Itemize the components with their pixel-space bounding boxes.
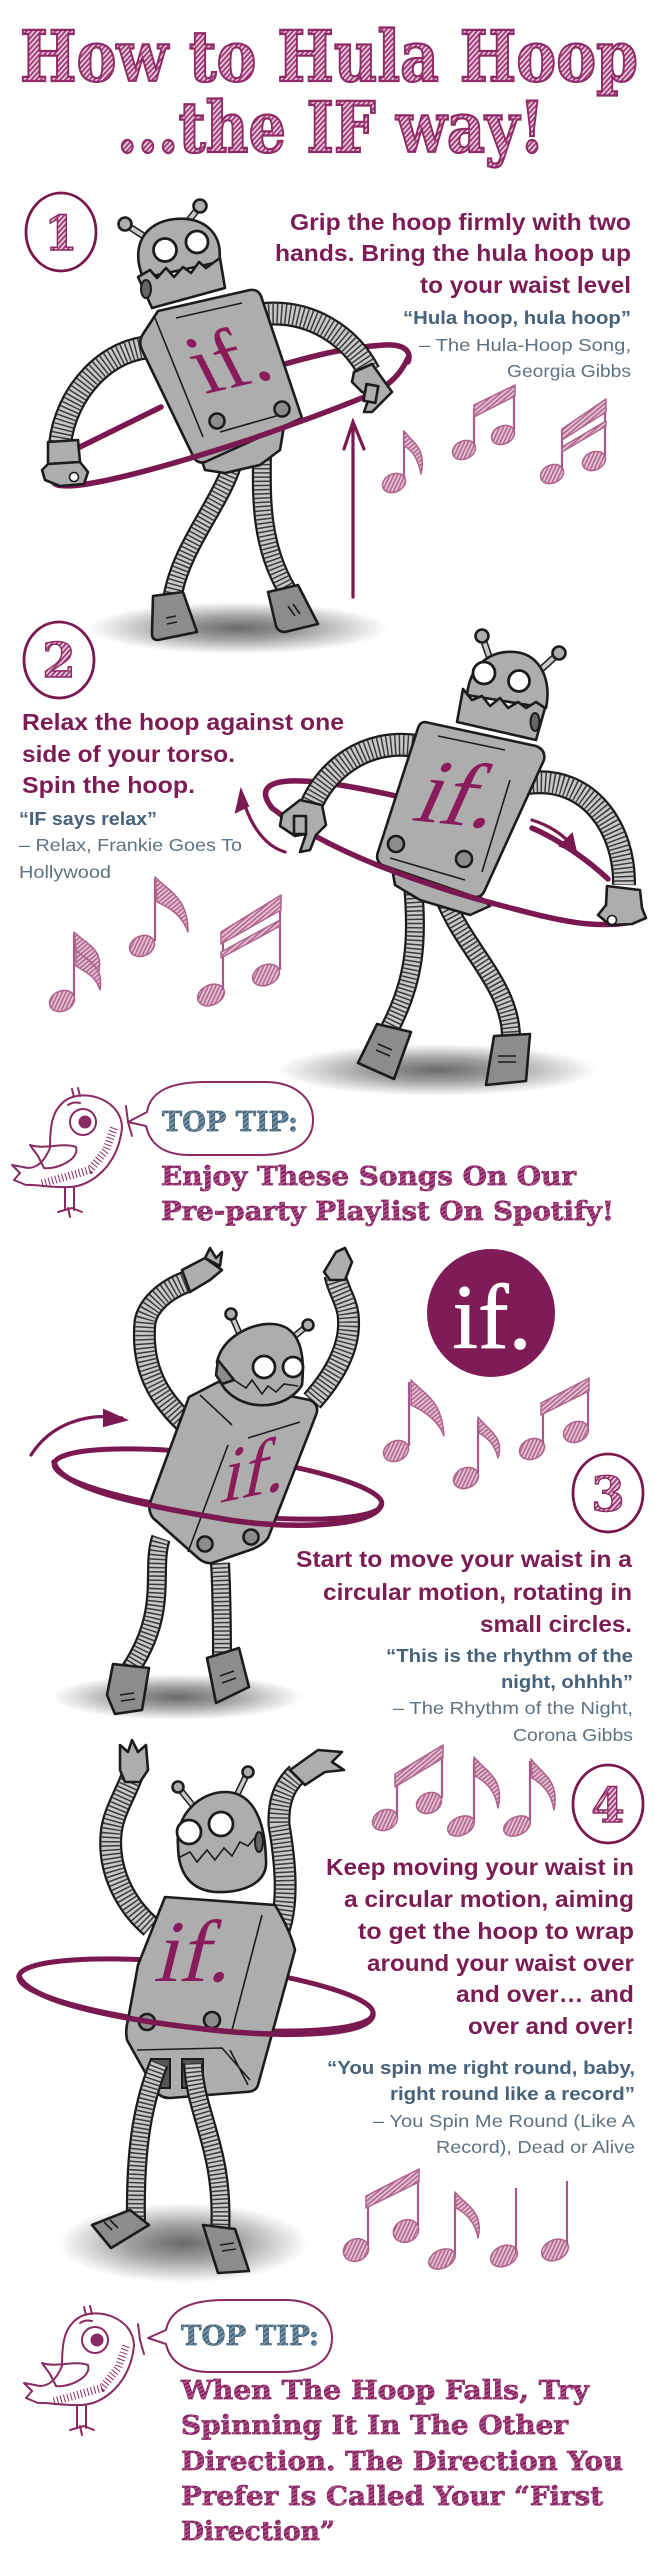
left curved rotation arrow — [236, 790, 285, 852]
step 2 instruction text: Spin the hoop. — [22, 772, 195, 798]
step 1 number badge: 1 — [44, 206, 78, 262]
legs 1 — [172, 447, 287, 600]
torso 2 — [377, 722, 544, 915]
top tip 2 text — [180, 2376, 623, 2547]
step 2 lyric quote: “IF says relax” — [19, 809, 157, 829]
hoop back 4 — [16, 1946, 376, 2044]
top tip 2 text: When The Hoop Falls, Try — [180, 2376, 590, 2406]
step 4 number badge — [573, 1765, 643, 1843]
music notes group 5 — [340, 2169, 572, 2273]
ground shadow 4 — [58, 2203, 308, 2283]
speech bubble 2 with top tip heading — [148, 2300, 332, 2372]
step 4 lyric quote — [327, 2058, 635, 2157]
ground shadow 1 — [88, 602, 388, 654]
torso 1 — [140, 290, 302, 473]
hands 4 — [120, 1740, 344, 1785]
title: ...the IF way! — [117, 86, 545, 169]
step 2 number badge: 2 — [42, 633, 76, 689]
step 4 instruction text: to get the hoop to wrap — [358, 1918, 634, 1944]
step 2 lyric quote — [19, 809, 242, 882]
step 2 instruction text: Relax the hoop against one — [22, 709, 344, 735]
step 1 lyric quote: “Hula hoop, hula hoop” — [403, 308, 631, 328]
music notes group 2 — [46, 877, 283, 1016]
step 1 lyric quote: Georgia Gibbs — [507, 361, 631, 381]
hoop back 1 — [80, 345, 409, 447]
step 3 instruction text: circular motion, rotating in — [323, 1579, 632, 1605]
bird 1 — [12, 1088, 132, 1217]
top tip 2 text: Direction. The Direction You — [181, 2447, 623, 2477]
robot 2 with hoop — [266, 630, 646, 1096]
step 3 lyric quote: “This is the rhythm of the — [386, 1646, 633, 1666]
music notes group 4 — [369, 1745, 555, 1840]
top tip 2 text: Spinning It In The Other — [181, 2411, 568, 2441]
robot 3 with hoop — [51, 1248, 385, 1720]
step 4 lyric quote: “You spin me right round, baby, — [327, 2058, 635, 2078]
step 4 instruction text: over and over! — [468, 2013, 634, 2039]
shoes 1 — [152, 585, 318, 640]
step 4 instruction text: and over… and — [456, 1981, 634, 2007]
legs 4 — [136, 2063, 221, 2233]
step 4 instruction text: a circular motion, aiming — [344, 1886, 634, 1912]
step 1 lyric quote — [403, 308, 631, 381]
step 3 instruction text: small circles. — [480, 1611, 632, 1637]
top tip 2 text: Direction” — [181, 2517, 335, 2547]
head 3 — [216, 1308, 314, 1405]
hoop back 3 — [51, 1435, 385, 1533]
arms 3 — [144, 1275, 349, 1430]
shoes 3 — [107, 1648, 249, 1714]
torso 3 — [149, 1382, 317, 1563]
step 1 instruction text: Grip the hoop firmly with two — [290, 209, 631, 235]
head 1 — [118, 200, 225, 308]
step 3 lyric quote: night, ohhhh” — [501, 1672, 633, 1692]
legs 3 — [130, 1538, 222, 1670]
step 4 lyric quote: right round like a record” — [390, 2084, 635, 2104]
top tip 2 text: Prefer Is Called Your “First — [181, 2482, 603, 2512]
step 4 instruction text: around your waist over — [367, 1950, 634, 1976]
step 1 number badge — [26, 193, 96, 271]
torso 1: if. — [169, 307, 286, 411]
step 2 lyric quote: – Relax, Frankie Goes To — [19, 835, 242, 855]
head 4 — [172, 1766, 266, 1892]
top tip 1 text: Pre-party Playlist On Spotify! — [161, 1197, 614, 1227]
step 1 instruction text — [275, 209, 631, 298]
music notes group 3 — [380, 1378, 592, 1493]
speech bubble 2 with top tip heading: TOP TIP: — [181, 2321, 319, 2352]
music notes group 1 — [379, 385, 609, 496]
hands 1 — [42, 364, 392, 486]
step 1 instruction text: hands. Bring the hula hoop up — [275, 240, 631, 266]
legs 2 — [390, 885, 511, 1036]
right curved rotation arrow — [532, 820, 576, 852]
step 2 lyric quote: Hollywood — [19, 862, 111, 882]
arms 4 — [111, 1774, 297, 1935]
head 2 — [457, 630, 566, 740]
shoes 2 — [358, 1024, 530, 1085]
step 4 lyric quote: – You Spin Me Round (Like A — [373, 2111, 635, 2131]
speech bubble 1 with top tip heading — [128, 1082, 313, 1155]
if logo circle — [427, 1249, 555, 1377]
up arrow — [344, 422, 364, 597]
torso 4: if. — [148, 1903, 248, 2001]
hoop front 3 — [54, 1462, 381, 1525]
step 4 lyric quote: Record), Dead or Alive — [436, 2137, 635, 2157]
hands 3 — [182, 1248, 352, 1292]
title — [20, 15, 638, 169]
hoop front 2 — [272, 808, 632, 925]
top tip 1 text: Enjoy These Songs On Our — [161, 1162, 576, 1192]
bird 2 — [24, 2306, 144, 2435]
step 3 lyric quote: – The Rhythm of the Night, — [393, 1698, 633, 1718]
ground shadow 3 — [52, 1674, 302, 1720]
step 3 instruction text: Start to move your waist in a — [296, 1546, 632, 1572]
torso 2: if. — [401, 742, 523, 848]
robot 1 with hoop — [42, 200, 409, 654]
torso 3: if. — [215, 1418, 298, 1521]
top curved rotation arrow — [31, 1410, 126, 1455]
step 1 instruction text: to your waist level — [420, 272, 631, 298]
step 4 instruction text — [326, 1854, 634, 2039]
hoop front 1 — [54, 358, 408, 486]
step 2 instruction text: side of your torso. — [22, 741, 235, 767]
step 4 instruction text: Keep moving your waist in — [326, 1854, 634, 1880]
arms 2 — [310, 745, 624, 885]
hands 2 — [280, 800, 646, 925]
top tip 1 text — [161, 1162, 614, 1227]
if logo circle: if. — [452, 1266, 532, 1368]
step 2 number badge — [24, 622, 94, 698]
ground shadow 2 — [277, 1044, 597, 1096]
hoop back 2 — [266, 781, 608, 879]
step 3 number badge: 3 — [591, 1467, 625, 1523]
step 2 instruction text — [22, 709, 344, 798]
step 3 number badge — [573, 1454, 643, 1532]
torso 4 — [126, 1897, 295, 2098]
robot 4 with hoop — [16, 1740, 376, 2283]
speech bubble 1 with top tip heading: TOP TIP: — [162, 1107, 298, 1138]
step 3 lyric quote: Corona Gibbs — [513, 1725, 633, 1745]
step 3 lyric quote — [386, 1646, 633, 1745]
arms 1 — [60, 314, 369, 444]
hoop front 4 — [19, 1976, 373, 2034]
shoes 4 — [92, 2210, 249, 2273]
step 3 instruction text — [296, 1546, 632, 1637]
step 4 number badge: 4 — [591, 1778, 625, 1834]
step 1 lyric quote: – The Hula-Hoop Song, — [419, 335, 631, 355]
